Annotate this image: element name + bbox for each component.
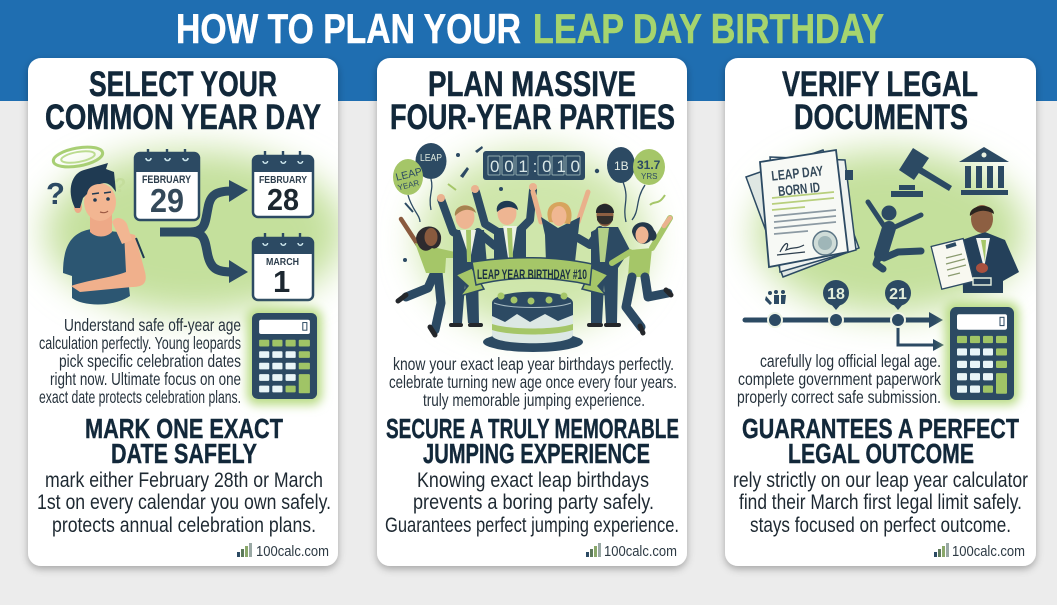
heading: PLAN MASSIVE xyxy=(428,65,636,104)
countdown display: 001:010 xyxy=(490,157,580,176)
icon: confused person xyxy=(46,144,146,304)
subheading: SECURE A TRULY MEMORABLE xyxy=(386,413,679,444)
icon: jumping figure xyxy=(868,202,921,269)
balloons right: YRS xyxy=(641,172,657,181)
icon: calendar february 29: 29 xyxy=(150,182,184,219)
text block: intro: exact date protects celebration plans. xyxy=(39,387,241,407)
icon: calendar february 29: FEBRUARY xyxy=(142,174,192,186)
icon: legal documents: LEAP DAY xyxy=(771,162,824,184)
birthday cake xyxy=(483,292,583,352)
title: HOW TO PLAN YOUR xyxy=(176,5,521,52)
subheading: LEGAL OUTCOME xyxy=(788,438,974,469)
marker: age 18: 18 xyxy=(827,286,845,303)
logo: 100calc.com xyxy=(604,544,677,560)
subheading: MARK ONE EXACT xyxy=(85,413,283,444)
icon: gavel xyxy=(891,148,952,197)
person: woman left xyxy=(398,219,455,335)
icon: legal documents: BORN ID xyxy=(777,179,821,199)
text block: intro: complete government paperwork xyxy=(738,369,941,389)
person: man right xyxy=(578,204,630,325)
icon: calculator xyxy=(252,313,317,399)
panel: select your common year day xyxy=(28,58,345,566)
balloons right: 31.7 xyxy=(637,158,661,172)
text block: intro xyxy=(389,354,677,410)
group of celebrating people xyxy=(398,183,671,335)
marker: age 18 xyxy=(823,280,849,310)
logo: 100calc.com xyxy=(256,544,329,560)
header band xyxy=(0,0,1057,101)
balloons left xyxy=(393,143,446,222)
balloons right: 1B xyxy=(614,159,629,173)
logo xyxy=(237,543,329,560)
birthday banner xyxy=(456,258,608,296)
countdown display xyxy=(483,151,585,180)
text block: details: protects annual celebration plans. xyxy=(52,513,316,537)
panel: verify legal documents xyxy=(725,58,1036,566)
subheading: DATE SAFELY xyxy=(111,438,257,469)
text block: intro: carefully log official legal age. xyxy=(760,351,941,371)
marker: people xyxy=(765,290,786,305)
heading: SELECT YOUR xyxy=(89,65,277,104)
heading xyxy=(45,65,321,137)
balloons left: LEAP xyxy=(394,166,423,184)
logo xyxy=(586,543,677,560)
text block: details: Guarantees perfect jumping experience. xyxy=(385,513,679,537)
text block: details: prevents a boring party safely. xyxy=(413,490,654,514)
text block: intro xyxy=(737,351,941,407)
subheading xyxy=(742,413,1019,469)
title: LEAP DAY BIRTHDAY xyxy=(533,5,884,52)
birthday banner: LEAP YEAR BIRTHDAY #10 xyxy=(477,267,587,282)
icon: courthouse xyxy=(959,147,1009,195)
text block: details: 1st on every calendar you own safely. xyxy=(37,490,331,514)
person: man 2 xyxy=(471,183,537,262)
illustration glow xyxy=(418,150,648,330)
icon: calendar march 1: 1 xyxy=(273,264,290,299)
icon: calendar february 28: 28 xyxy=(267,182,299,217)
balloons left: YEAR xyxy=(397,178,420,192)
heading xyxy=(390,65,675,137)
text block: intro xyxy=(39,315,241,407)
text block: details xyxy=(385,468,679,537)
text block: intro: Understand safe off-year age xyxy=(64,315,241,335)
icon: official with clipboard xyxy=(931,205,1019,293)
icon: calculator glow xyxy=(945,302,1019,405)
subheading xyxy=(386,413,679,469)
text block: details: Knowing exact leap birthdays xyxy=(417,468,649,492)
title xyxy=(176,5,884,52)
logo: 100calc.com xyxy=(952,544,1025,560)
illustration glow xyxy=(45,150,345,314)
heading xyxy=(782,65,978,137)
timeline xyxy=(745,280,944,351)
subheading: JUMPING EXPERIENCE xyxy=(423,438,650,469)
icon: calendar march 1 xyxy=(253,233,313,300)
icon: confused person: ? xyxy=(46,176,65,211)
panel: plan massive four-year parties xyxy=(377,58,687,566)
marker: age 21 xyxy=(885,280,911,310)
text block: intro: celebrate turning new age once every four years. xyxy=(389,372,677,392)
illustration glow xyxy=(755,150,1025,314)
text block: details xyxy=(37,468,331,537)
icon: calendar february 28 xyxy=(253,151,313,217)
heading: VERIFY LEGAL xyxy=(782,65,978,104)
icon: calendar march 1: MARCH xyxy=(266,256,299,268)
text block: intro: truly memorable jumping experience. xyxy=(423,390,645,410)
text block: intro: know your exact leap year birthdays perfectly. xyxy=(393,354,674,374)
subheading xyxy=(85,413,283,469)
text block: details: mark either February 28th or March xyxy=(45,468,323,492)
person: woman right xyxy=(612,218,671,333)
text block: intro: pick specific celebration dates xyxy=(59,351,241,371)
text block: intro: properly correct safe submission. xyxy=(737,387,941,407)
icon: confused person: ? xyxy=(114,175,126,197)
logo xyxy=(934,543,1025,560)
icon: calendar february 28: FEBRUARY xyxy=(259,174,307,186)
heading: FOUR-YEAR PARTIES xyxy=(390,98,675,137)
balloons right xyxy=(607,147,665,222)
heading: DOCUMENTS xyxy=(794,98,968,137)
icon: splitting arrows xyxy=(160,180,248,283)
marker: age 21: 21 xyxy=(889,286,907,303)
icon: calendar february 29 xyxy=(135,149,199,220)
person: man 1 xyxy=(437,194,495,325)
confetti xyxy=(403,146,665,262)
text block: details xyxy=(733,468,1028,537)
icon: calculator xyxy=(950,307,1014,400)
text block: intro: right now. Ultimate focus on one xyxy=(50,369,241,389)
text block: intro: calculation perfectly. Young leopards xyxy=(39,333,241,353)
icon: calculator glow xyxy=(247,308,322,405)
heading: COMMON YEAR DAY xyxy=(45,98,321,137)
person: woman centre xyxy=(533,192,588,262)
balloons left: LEAP xyxy=(420,152,442,164)
icon: legal documents xyxy=(746,150,859,277)
